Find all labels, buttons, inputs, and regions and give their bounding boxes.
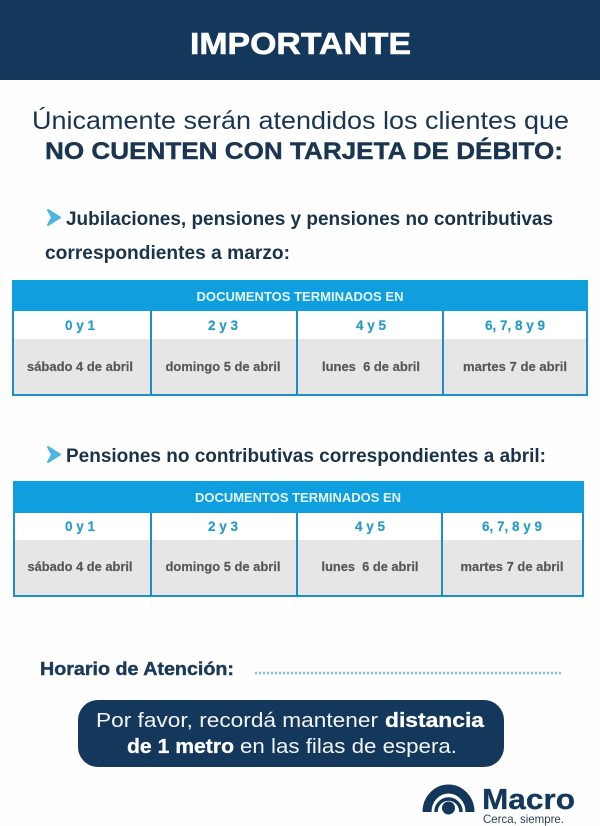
section heading: marzo (45, 209, 553, 264)
column: 2 y 3: 2 y 3 (208, 318, 239, 333)
column: 2 y 3: domingo 5 de abril (166, 359, 280, 374)
intro text: NO CUENTEN CON TARJETA DE DÉBITO: (45, 137, 563, 165)
column: 4 y 5: 4 y 5 (355, 519, 386, 534)
icon: Macro arcs (427, 789, 470, 814)
column: 0 y 1 (15, 513, 150, 595)
table header (13, 481, 584, 513)
callout: keep distance: en las filas de espera. (240, 735, 457, 758)
column: 6, 7, 8 y 9: 6, 7, 8 y 9 (485, 318, 545, 333)
logo: Macro (427, 784, 575, 826)
section heading: marzo: Jubilaciones, pensiones y pensiones no contributivas (66, 209, 553, 230)
opening hours line: Horario de Atención: (40, 658, 234, 679)
column: 6, 7, 8 y 9 (443, 513, 582, 595)
column: 2 y 3 (152, 311, 296, 394)
table: documentos marzo (12, 280, 588, 396)
callout: keep distance: de 1 metro (127, 735, 234, 758)
column: 6, 7, 8 y 9: 6, 7, 8 y 9 (482, 519, 542, 534)
section heading: marzo: correspondientes a marzo: (45, 243, 290, 264)
logo: Macro: Cerca, siempre. (483, 812, 564, 826)
column: 0 y 1 (14, 311, 150, 394)
column: 4 y 5 (298, 513, 441, 595)
column: 4 y 5: 4 y 5 (356, 318, 387, 333)
column: 6, 7, 8 y 9: martes 7 de abril (463, 359, 567, 374)
icon: arrow marker (48, 447, 60, 462)
callout: keep distance: distancia (385, 709, 485, 732)
intro text: Únicamente serán atendidos los clientes que (32, 106, 569, 135)
header banner (0, 0, 600, 80)
intro text (32, 106, 569, 165)
header banner: IMPORTANTE (190, 26, 411, 61)
column: 6, 7, 8 y 9: martes 7 de abril (460, 559, 564, 574)
section heading: abril: Pensiones no contributivas correspondientes a abril: (66, 446, 546, 467)
table header (12, 280, 588, 311)
column: 2 y 3: domingo 5 de abril (166, 559, 280, 574)
column: 0 y 1: sábado 4 de abril (27, 359, 133, 374)
table: documentos abril: DOCUMENTOS TERMINADOS EN (195, 490, 401, 505)
column: 4 y 5: lunes 6 de abril (322, 559, 418, 574)
callout: keep distance: Por favor, recordá mantener (96, 709, 378, 732)
table: documentos abril (13, 481, 584, 597)
column: 4 y 5: lunes 6 de abril (322, 359, 420, 374)
callout: keep distance (78, 700, 504, 767)
logo: Macro: Macro (482, 784, 575, 816)
table: documentos marzo: DOCUMENTOS TERMINADOS EN (196, 289, 404, 304)
column: 0 y 1: sábado 4 de abril (28, 559, 132, 574)
column: 2 y 3 (152, 513, 296, 595)
column: 4 y 5 (298, 311, 442, 394)
column: 0 y 1: 0 y 1 (65, 318, 96, 333)
column: 6, 7, 8 y 9 (444, 311, 586, 394)
column: 0 y 1: 0 y 1 (65, 519, 96, 534)
column: 2 y 3: 2 y 3 (208, 519, 239, 534)
icon: arrow marker (48, 210, 60, 225)
